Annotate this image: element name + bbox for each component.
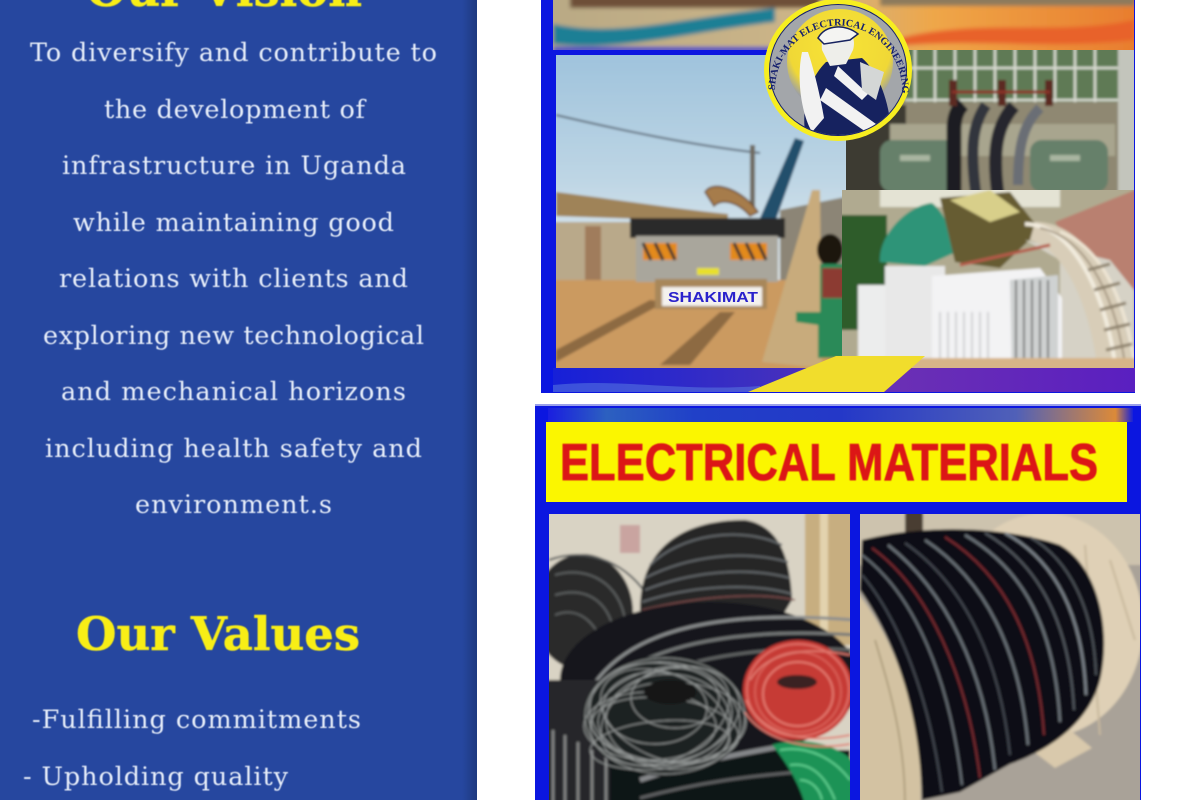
text block: vision statement: To diversify and contribute to	[30, 38, 437, 68]
panel: engineering works photo collage	[541, 0, 1135, 393]
banner: electrical materials: ELECTRICAL MATERIALS	[560, 434, 1098, 492]
heading: Our Values: Our Values	[76, 607, 360, 661]
photo: workers loading transformer	[842, 190, 1134, 368]
label: SHAKIMAT: SHAKIMAT	[668, 289, 758, 306]
panel: electrical materials	[533, 404, 1150, 800]
yellow wedge	[748, 356, 925, 392]
icon: worker figure	[800, 27, 892, 140]
text block: vision statement: the development of	[104, 95, 367, 125]
text block: vision statement	[30, 38, 437, 520]
text block: vision statement: exploring new technological	[43, 321, 424, 351]
text block: vision statement: including health safety and	[45, 434, 422, 464]
photo: assorted cable coils	[549, 514, 850, 800]
rainbow strip	[548, 408, 1133, 422]
panel: vision and values	[0, 0, 477, 800]
bottom band	[553, 356, 1135, 392]
text block: vision statement: and mechanical horizons	[61, 377, 406, 407]
photo: transformer with cables	[846, 50, 1134, 190]
text block: values list	[23, 705, 361, 792]
text block: vision statement: environment.s	[135, 490, 332, 520]
logo: Shaki-Mat emblem	[764, 0, 912, 141]
banner: electrical materials	[546, 422, 1127, 502]
photo: cable drum	[850, 505, 1150, 800]
text block: vision statement: infrastructure in Uganda	[62, 151, 406, 181]
top banner strip	[553, 0, 1134, 50]
text block: vision statement: relations with clients and	[59, 264, 408, 294]
text block: values list: -Fulfilling commitments	[32, 705, 361, 735]
text block: values list: - Upholding quality	[23, 762, 289, 792]
text block: vision statement: while maintaining good	[73, 208, 394, 238]
photo: crane truck with pole	[556, 55, 846, 368]
